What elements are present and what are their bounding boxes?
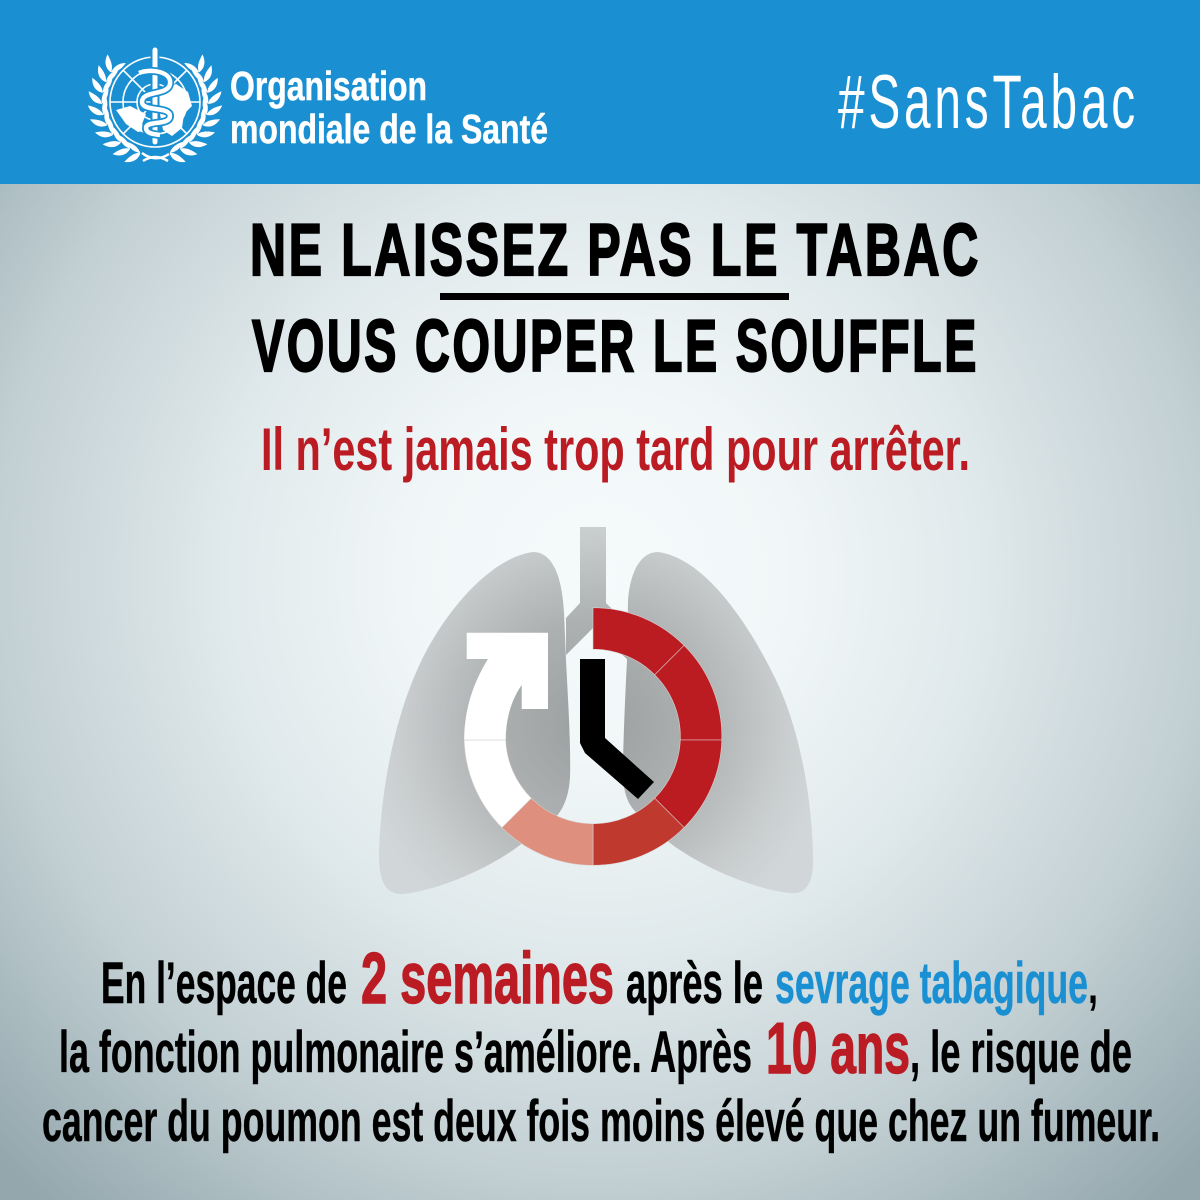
body text: 10 ans	[766, 1009, 910, 1089]
body text: ,	[1088, 958, 1098, 1014]
organisation name: mondiale de la Santé	[230, 106, 548, 152]
arrow	[464, 633, 548, 740]
body text: 2 semaines	[361, 939, 614, 1019]
header band	[0, 0, 1200, 184]
icon: WHO emblem	[87, 50, 223, 165]
body text: après le	[626, 951, 763, 1016]
clock hands	[580, 659, 654, 799]
organisation name	[230, 63, 548, 152]
organisation name: Organisation	[230, 63, 427, 109]
body text: En l’espace de	[101, 951, 347, 1016]
title	[250, 210, 981, 387]
body text	[42, 939, 1160, 1154]
lungs and clock illustration	[379, 527, 813, 894]
body text: la fonction pulmonaire s’améliore. Après	[59, 1020, 752, 1085]
lungs	[379, 527, 813, 894]
clock ring: red segments	[464, 608, 722, 865]
